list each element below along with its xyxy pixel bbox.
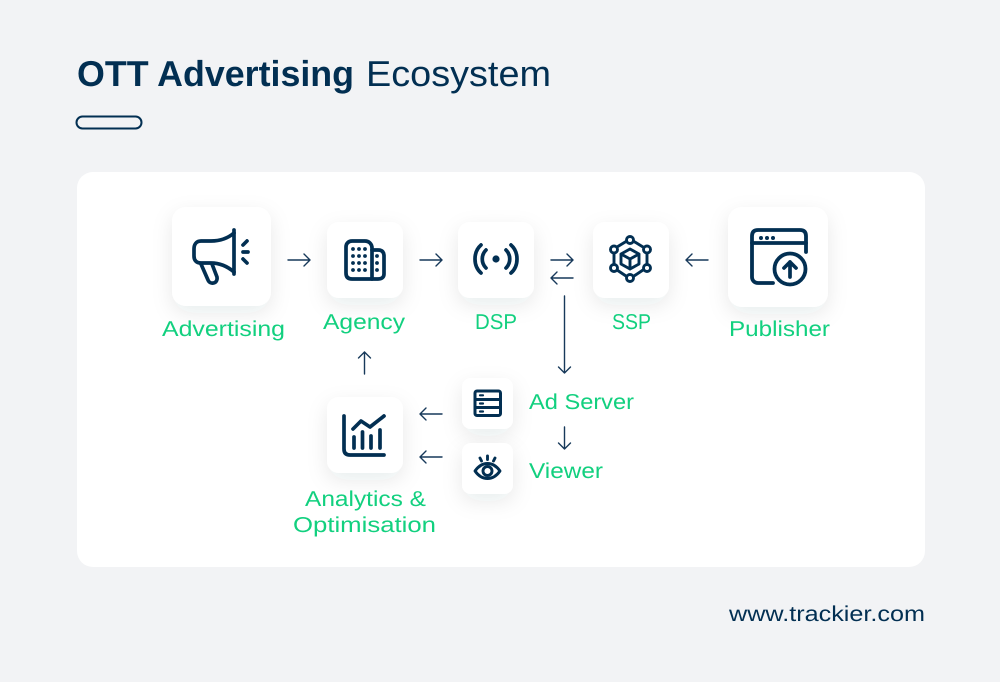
node: Advertising: [162, 207, 285, 341]
node: DSP: [458, 222, 534, 334]
icon: eye: [475, 456, 500, 478]
icon: server stack: [475, 391, 500, 416]
title: Ecosystem: [366, 53, 551, 94]
icon: analytics chart: [344, 416, 384, 455]
label: DSP: DSP: [475, 310, 517, 334]
label: Publisher: Publisher: [729, 317, 830, 341]
label: Viewer: Viewer: [529, 459, 603, 483]
node: Ad Server: [462, 378, 634, 429]
label: SSP: SSP: [612, 310, 651, 334]
title: OTT Advertising: [77, 53, 354, 94]
arrow: DSP to SSP: [551, 254, 573, 266]
label: Ad Server: Ad Server: [529, 390, 634, 414]
icon: browser window with upload: [752, 230, 806, 284]
label: Agency: Agency: [323, 310, 405, 334]
panel: ecosystem diagram: [77, 172, 925, 567]
label: Analytics & Optimisation: Analytics &: [305, 487, 426, 511]
arrow: Publisher to SSP: [686, 254, 708, 266]
title: [77, 53, 551, 94]
arrow: Analytics to Agency: [358, 352, 370, 374]
label: Analytics & Optimisation: [293, 487, 436, 537]
node: Agency: [323, 222, 405, 334]
website url: www.trackier.com: [728, 602, 925, 626]
node: Publisher: [728, 207, 830, 341]
arrow: Advertising to Agency: [288, 254, 310, 266]
node: Viewer: [462, 443, 603, 494]
arrow: Ad Server to Viewer: [558, 427, 570, 449]
icon: megaphone: [194, 230, 248, 283]
icon: network cube: [610, 236, 650, 282]
arrow: Agency to DSP: [420, 254, 442, 266]
icon: buildings: [346, 241, 384, 279]
title underline pill: [76, 116, 142, 128]
node: Analytics and Optimisation: [293, 397, 436, 537]
icon: broadcast signal: [475, 245, 517, 273]
node: SSP: [593, 222, 669, 334]
label: Analytics & Optimisation: Optimisation: [293, 513, 436, 537]
arrow: SSP to DSP: [551, 272, 573, 284]
arrow: down to Ad Server: [558, 296, 570, 373]
arrow: Ad Server to Analytics: [420, 408, 442, 420]
arrow: Viewer to Analytics: [420, 451, 442, 463]
label: Advertising: Advertising: [162, 317, 285, 341]
